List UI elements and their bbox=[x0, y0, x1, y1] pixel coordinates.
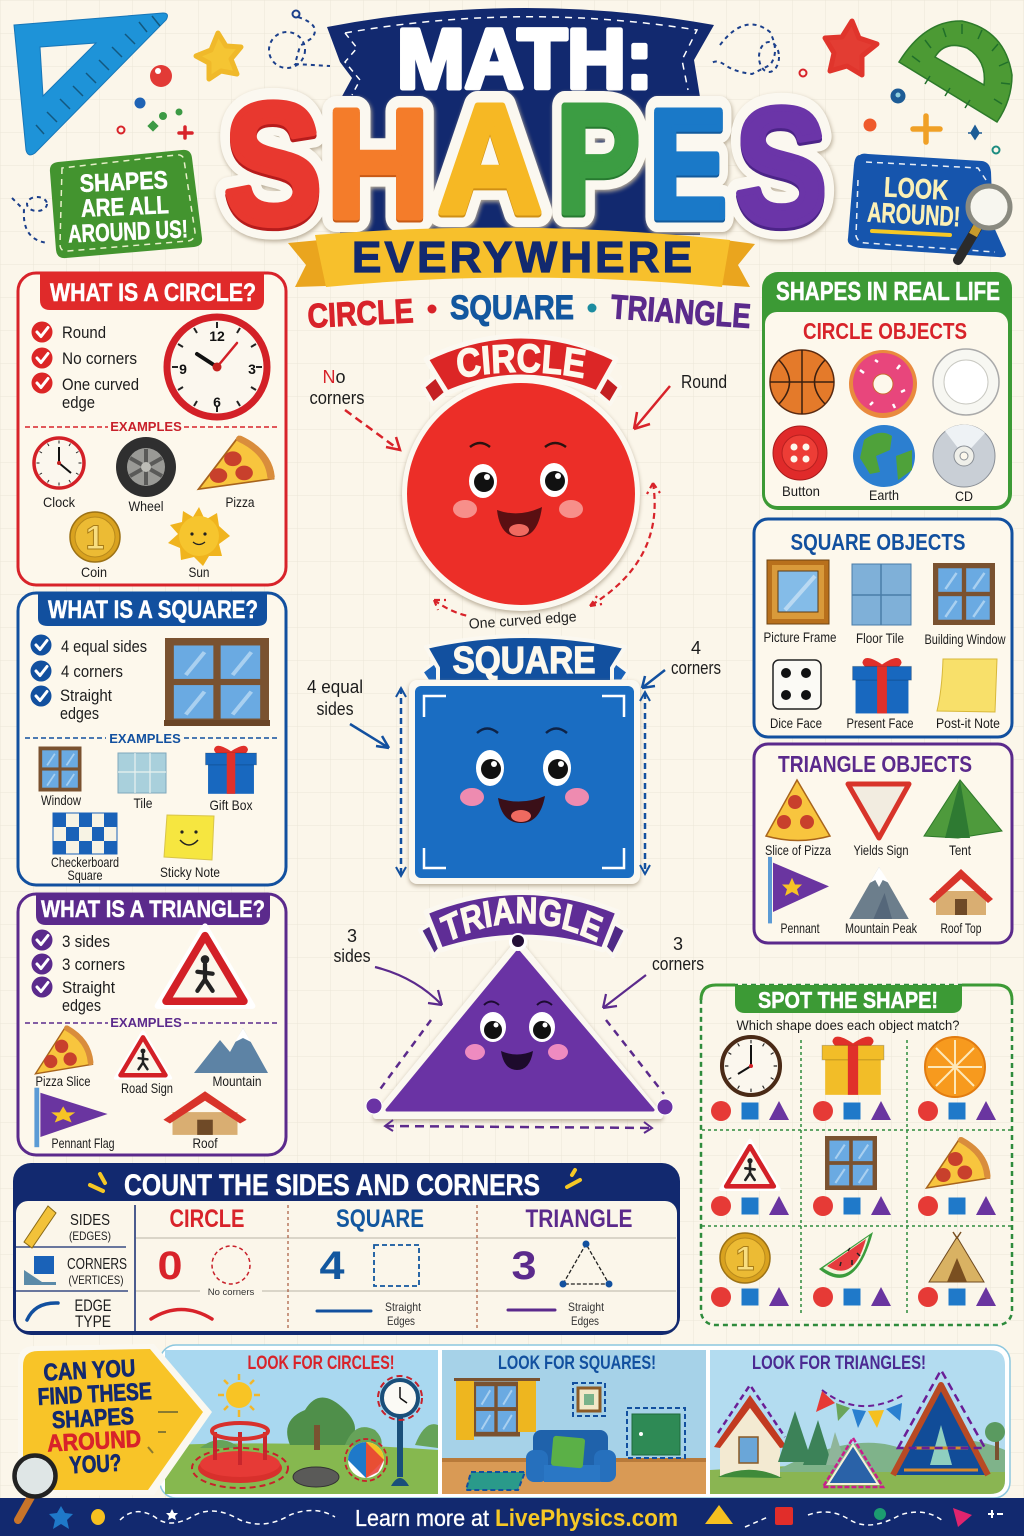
icon: green cabinet bbox=[627, 1408, 685, 1458]
hero: square character bbox=[307, 636, 721, 884]
annotation: 4 corners: 4 bbox=[691, 638, 701, 658]
annotation: 4 equal sides bbox=[307, 677, 406, 876]
example: pizza slice: Pizza Slice bbox=[36, 1073, 91, 1089]
divider: examples: EXAMPLES bbox=[109, 731, 181, 746]
callout: can you find these shapes: SHAPES bbox=[51, 1403, 135, 1434]
callout: shapes are all around us: SHAPES bbox=[79, 166, 168, 198]
icon: mountain peak bbox=[845, 867, 918, 936]
item: pizza bbox=[926, 1138, 990, 1188]
checklist: 4 corners bbox=[61, 663, 123, 681]
subtitle: circle square triangle: SQUARE bbox=[450, 289, 574, 327]
scene: look for triangles bbox=[710, 1350, 1005, 1494]
ribbon: EVERYWHERE: EVERYWHERE bbox=[352, 233, 692, 282]
column: triangle: 3 bbox=[512, 1244, 536, 1288]
panel: what is a triangle bbox=[18, 893, 286, 1155]
title ribbon: MATH bbox=[327, 8, 714, 235]
example: tile: Tile bbox=[134, 795, 153, 811]
row label: edge type bbox=[27, 1296, 112, 1331]
banner: square bbox=[422, 636, 628, 684]
example: tile bbox=[118, 753, 166, 811]
banner: circle: CIRCLE bbox=[457, 344, 586, 378]
example: sticky note bbox=[160, 815, 220, 880]
item: watermelon bbox=[819, 1232, 873, 1278]
banner: square: SQUARE bbox=[452, 640, 596, 682]
panel: count the sides and corners bbox=[13, 1163, 680, 1335]
panel: what is a square bbox=[18, 592, 286, 885]
icon: blue sofa bbox=[526, 1430, 616, 1482]
title word: SHAPES: P bbox=[556, 73, 640, 245]
footer icons right bbox=[705, 1505, 1004, 1527]
column: triangle: Straight bbox=[568, 1300, 605, 1314]
icon: tent bbox=[924, 780, 1002, 858]
panel: scene frame bbox=[160, 1345, 1010, 1498]
subtitle: circle square triangle: CIRCLE bbox=[307, 292, 414, 336]
example: clock bbox=[34, 438, 84, 510]
heading bbox=[38, 592, 267, 626]
icon: present: Present Face bbox=[846, 715, 914, 731]
callout: shapes are all around us: AROUND US! bbox=[67, 215, 189, 248]
hero: circle character bbox=[310, 334, 727, 633]
checklist: Straight bbox=[62, 979, 115, 997]
icon: picture frame: Picture Frame bbox=[764, 629, 837, 645]
banner: circle bbox=[426, 334, 618, 402]
ribbon: EVERYWHERE bbox=[288, 228, 755, 287]
icon: yellow star bbox=[196, 33, 241, 79]
icon: plate bbox=[933, 349, 999, 415]
item: coin bbox=[720, 1233, 770, 1283]
row label: sides: SIDES bbox=[70, 1212, 110, 1229]
heading: WHAT IS A SQUARE? bbox=[48, 596, 258, 624]
annotation: 4 equal sides: sides bbox=[316, 699, 354, 719]
icon: sun bbox=[218, 1374, 260, 1417]
example: mountain: Mountain bbox=[212, 1073, 262, 1089]
title word: SHAPES: S bbox=[224, 68, 322, 260]
annotation: 3 corners: 3 bbox=[673, 934, 683, 954]
icon: donut bbox=[849, 350, 917, 418]
example: gift box bbox=[206, 746, 256, 813]
example: checkerboard: Checkerboard bbox=[51, 854, 119, 870]
icon: post-it note bbox=[936, 659, 1000, 731]
checklist: 4 equal sides bbox=[61, 638, 147, 656]
icon: magnifying glass bbox=[958, 186, 1010, 260]
face: triangle bbox=[465, 1002, 568, 1070]
annotation: one curved edge bbox=[434, 483, 660, 633]
icon: mountain peak: Mountain Peak bbox=[845, 920, 918, 936]
title word: SHAPES: P bbox=[556, 73, 640, 245]
annotation: base arrow bbox=[385, 1120, 652, 1133]
row label: sides bbox=[24, 1206, 111, 1248]
callout: can you find these shapes: YOU? bbox=[69, 1450, 122, 1479]
item: window bbox=[825, 1136, 877, 1190]
item: clock bbox=[722, 1037, 780, 1095]
divider: examples: EXAMPLES bbox=[110, 419, 182, 434]
divider: examples: EXAMPLES bbox=[110, 1015, 182, 1030]
example: road sign: Road Sign bbox=[121, 1080, 173, 1096]
callout: look around: LOOK bbox=[883, 171, 949, 206]
annotation: 4 equal sides: 4 equal bbox=[307, 677, 363, 697]
website link bbox=[355, 1505, 678, 1532]
icon: clock: 12 bbox=[209, 328, 225, 344]
column: square: Edges bbox=[387, 1314, 415, 1328]
checklist: 3 sides bbox=[62, 933, 110, 951]
example: sticky note: Sticky Note bbox=[160, 864, 220, 880]
checklist bbox=[32, 322, 139, 412]
icon: pizza slice: Slice of Pizza bbox=[765, 842, 831, 858]
row label: edge type: EDGE bbox=[74, 1296, 112, 1315]
column: circle: 0 bbox=[158, 1244, 182, 1288]
icon: small tent bbox=[823, 1438, 883, 1487]
example: checkerboard bbox=[51, 813, 119, 883]
decorations top right bbox=[710, 24, 1000, 153]
example: pizza: Pizza bbox=[226, 494, 255, 510]
banner: triangle: TRIANGLE bbox=[438, 896, 604, 943]
icon: window bbox=[164, 638, 270, 726]
example: wheel bbox=[116, 437, 176, 514]
row label: edge type: TYPE bbox=[75, 1312, 111, 1331]
annotation: round bbox=[634, 372, 727, 429]
checklist: No corners bbox=[62, 350, 137, 368]
subheading: CIRCLE OBJECTS bbox=[803, 318, 967, 344]
annotation: no corners bbox=[310, 367, 400, 450]
icon: merry-go-round bbox=[192, 1423, 288, 1488]
annotation: no corners: corners bbox=[310, 388, 364, 408]
title word: SHAPES: A bbox=[438, 73, 542, 245]
callout: can you find these shapes: FIND THESE bbox=[37, 1378, 152, 1411]
example: pennant flag bbox=[34, 1088, 115, 1151]
heading: WHAT IS A CIRCLE? bbox=[50, 279, 256, 307]
heading: WHAT IS A TRIANGLE? bbox=[41, 896, 265, 923]
icon: room window bbox=[454, 1378, 540, 1440]
icon: beach ball bbox=[345, 1439, 387, 1481]
checklist: Straight bbox=[60, 687, 112, 705]
table lines bbox=[16, 1205, 676, 1331]
column: square: 4 bbox=[320, 1244, 345, 1288]
checklist: edge bbox=[62, 394, 95, 412]
column: square: SQUARE bbox=[336, 1205, 424, 1233]
callout: can you find these shapes: CAN YOU bbox=[43, 1355, 136, 1387]
title word: SHAPES: E bbox=[649, 78, 727, 250]
icon: house bbox=[714, 1385, 787, 1478]
icon: earth bbox=[853, 425, 915, 503]
example: gift box: Gift Box bbox=[210, 797, 252, 813]
face: square bbox=[460, 728, 589, 823]
column: triangle bbox=[508, 1205, 632, 1328]
subheading: TRIANGLE OBJECTS bbox=[778, 751, 972, 777]
heading: SPOT THE SHAPE! bbox=[758, 987, 938, 1013]
row label: corners bbox=[24, 1256, 127, 1287]
example: checkerboard: Square bbox=[68, 867, 103, 883]
icon: clock: 6 bbox=[213, 394, 221, 410]
title ribbon: MATH: MATH: bbox=[397, 12, 653, 106]
annotation: 4 corners: corners bbox=[671, 658, 721, 678]
subheading: SQUARE OBJECTS bbox=[790, 529, 966, 555]
icon: yield sign: Yields Sign bbox=[854, 842, 908, 858]
subtitle: circle square triangle bbox=[307, 288, 752, 336]
icon: earth: Earth bbox=[869, 487, 899, 503]
heading bbox=[40, 272, 264, 310]
callout: shapes are all around us bbox=[50, 150, 202, 258]
item: teepee bbox=[929, 1232, 984, 1282]
icon: picture frame bbox=[764, 560, 837, 645]
title word: SHAPES: A bbox=[438, 73, 542, 245]
icon: clock: 3 bbox=[248, 361, 256, 377]
annotation: 4 corners bbox=[640, 638, 721, 874]
icon: floor tile bbox=[852, 564, 911, 646]
example: roof bbox=[163, 1091, 247, 1151]
footer band bbox=[0, 1498, 1024, 1536]
checklist bbox=[30, 634, 147, 723]
item: warning sign bbox=[721, 1140, 779, 1189]
icon: clock bbox=[167, 317, 267, 417]
icon: dice: Dice Face bbox=[770, 715, 822, 731]
example: coin: Coin bbox=[81, 564, 107, 580]
icon: button: Button bbox=[782, 483, 820, 499]
callout: can you find these shapes bbox=[18, 1344, 212, 1496]
column: circle: CIRCLE bbox=[170, 1205, 244, 1233]
icon: dice bbox=[770, 660, 822, 731]
scene: look for squares bbox=[442, 1350, 706, 1494]
column: triangle: TRIANGLE bbox=[526, 1205, 632, 1233]
scene: look for circles: LOOK FOR CIRCLES! bbox=[248, 1353, 394, 1374]
icon: clock: 9 bbox=[179, 361, 187, 377]
icon: building window bbox=[924, 563, 1006, 647]
title word: SHAPES: E bbox=[649, 78, 727, 250]
title word: SHAPES: S bbox=[735, 74, 827, 258]
example: sun bbox=[168, 507, 230, 580]
website link: Learn more at bbox=[355, 1505, 490, 1531]
callout: look around bbox=[848, 154, 1006, 257]
icon: roof top: Roof Top bbox=[940, 920, 982, 936]
column: circle bbox=[151, 1205, 254, 1319]
corner dots bbox=[366, 933, 673, 1115]
title word: SHAPES: S bbox=[735, 74, 827, 258]
icon: tree bbox=[985, 1422, 1005, 1460]
icon: pennant bbox=[768, 857, 829, 936]
icon: manhole bbox=[293, 1467, 339, 1487]
title word: SHAPES: H bbox=[326, 78, 430, 250]
row label: corners: (VERTICES) bbox=[68, 1273, 124, 1287]
annotation: 3 corners bbox=[603, 934, 704, 1094]
checklist bbox=[32, 930, 125, 1015]
icon: button bbox=[773, 426, 827, 499]
icon: street clock bbox=[378, 1376, 422, 1486]
annotation: one curved edge: One curved edge bbox=[468, 609, 577, 633]
icon: big magnifying glass bbox=[14, 1456, 56, 1520]
annotation: no corners: No bbox=[322, 367, 346, 387]
face: circle bbox=[453, 443, 583, 537]
hero: triangle character bbox=[334, 890, 704, 1134]
annotation: 3 sides: sides bbox=[334, 946, 370, 966]
title word: SHAPES: H bbox=[326, 78, 430, 250]
shape: red circle bbox=[402, 377, 640, 611]
checklist: 3 corners bbox=[62, 956, 125, 974]
annotation: 3 sides: 3 bbox=[347, 926, 357, 946]
example: mountain bbox=[194, 1028, 268, 1089]
icon: basketball bbox=[770, 350, 834, 414]
callout: can you find these shapes: AROUND bbox=[46, 1426, 142, 1458]
example: pizza bbox=[198, 437, 274, 510]
checklist: edges bbox=[62, 997, 101, 1015]
footer icons left bbox=[49, 1506, 335, 1529]
annotation: 3 sides bbox=[334, 926, 442, 1092]
icon: tent: Tent bbox=[949, 842, 971, 858]
icon: post-it note: Post-it Note bbox=[936, 715, 1000, 731]
example: coin bbox=[70, 512, 120, 580]
shape: blue square bbox=[409, 680, 640, 884]
callout: shapes are all around us: ARE ALL bbox=[80, 191, 169, 223]
icon: yield sign bbox=[848, 784, 909, 858]
panel: triangle objects bbox=[754, 744, 1012, 943]
decorations top left bbox=[12, 10, 330, 243]
panel: spot the shape bbox=[701, 985, 1012, 1325]
row label: corners: CORNERS bbox=[67, 1256, 127, 1273]
choices bbox=[711, 1101, 996, 1307]
icon: pine trees bbox=[778, 1411, 846, 1465]
row label: sides: (EDGES) bbox=[69, 1229, 111, 1243]
column: triangle: Edges bbox=[571, 1314, 599, 1328]
item: orange bbox=[925, 1037, 985, 1097]
example: window bbox=[38, 746, 82, 808]
annotation: round: Round bbox=[681, 372, 727, 392]
annotation: 3 corners: corners bbox=[652, 954, 704, 974]
column: square: Straight bbox=[385, 1300, 422, 1314]
example: pizza slice bbox=[36, 1026, 92, 1089]
icon: blue set square bbox=[14, 13, 167, 155]
checklist: edges bbox=[60, 705, 99, 723]
scene: look for circles bbox=[165, 1350, 438, 1494]
website link: LivePhysics.com bbox=[495, 1505, 678, 1532]
example: road sign bbox=[116, 1032, 173, 1096]
icon: bunting bbox=[816, 1390, 905, 1428]
icon: roof top bbox=[929, 869, 993, 936]
scene: look for triangles: LOOK FOR TRIANGLES! bbox=[752, 1353, 926, 1374]
icon: rug bbox=[466, 1472, 525, 1490]
column: square bbox=[317, 1205, 424, 1328]
checklist: Round bbox=[62, 324, 106, 342]
item: gift bbox=[822, 1037, 884, 1095]
subtitle: circle square triangle: TRIANGLE bbox=[610, 288, 752, 336]
example: pennant flag: Pennant Flag bbox=[52, 1135, 114, 1151]
scene: look for squares: LOOK FOR SQUARES! bbox=[498, 1353, 656, 1374]
example: roof: Roof bbox=[192, 1135, 218, 1151]
example: window: Window bbox=[41, 792, 82, 808]
icon: pizza slice bbox=[765, 780, 831, 858]
icon: pennant: Pennant bbox=[780, 920, 820, 936]
icon: cd bbox=[933, 425, 995, 504]
heading: COUNT THE SIDES AND CORNERS bbox=[124, 1169, 540, 1202]
example: wheel: Wheel bbox=[128, 498, 164, 514]
icon: framed picture bbox=[573, 1383, 605, 1416]
icon: cd: CD bbox=[955, 488, 973, 504]
icon: green protractor bbox=[899, 21, 1012, 122]
panel: what is a circle bbox=[18, 272, 286, 585]
inner panel bbox=[765, 312, 1008, 506]
panel: square objects bbox=[754, 519, 1012, 737]
checklist: One curved bbox=[62, 376, 139, 394]
icon: a-frame cabin bbox=[893, 1370, 988, 1475]
title word: SHAPES: S bbox=[224, 68, 322, 260]
title word: SHAPES bbox=[224, 68, 827, 260]
example: clock: Clock bbox=[43, 494, 76, 510]
example: sun: Sun bbox=[188, 564, 210, 580]
prompt: Which shape does each object match? bbox=[736, 1017, 960, 1033]
icon: floor tile: Floor Tile bbox=[856, 630, 904, 646]
icon: red star bbox=[825, 21, 877, 75]
panel: shapes in real life bbox=[762, 272, 1012, 510]
column: circle: No corners bbox=[208, 1287, 254, 1298]
icon: present bbox=[846, 658, 914, 731]
shape: purple triangle bbox=[376, 942, 660, 1116]
icon: warning sign bbox=[158, 926, 252, 1006]
callout: look around: AROUND! bbox=[867, 197, 961, 232]
